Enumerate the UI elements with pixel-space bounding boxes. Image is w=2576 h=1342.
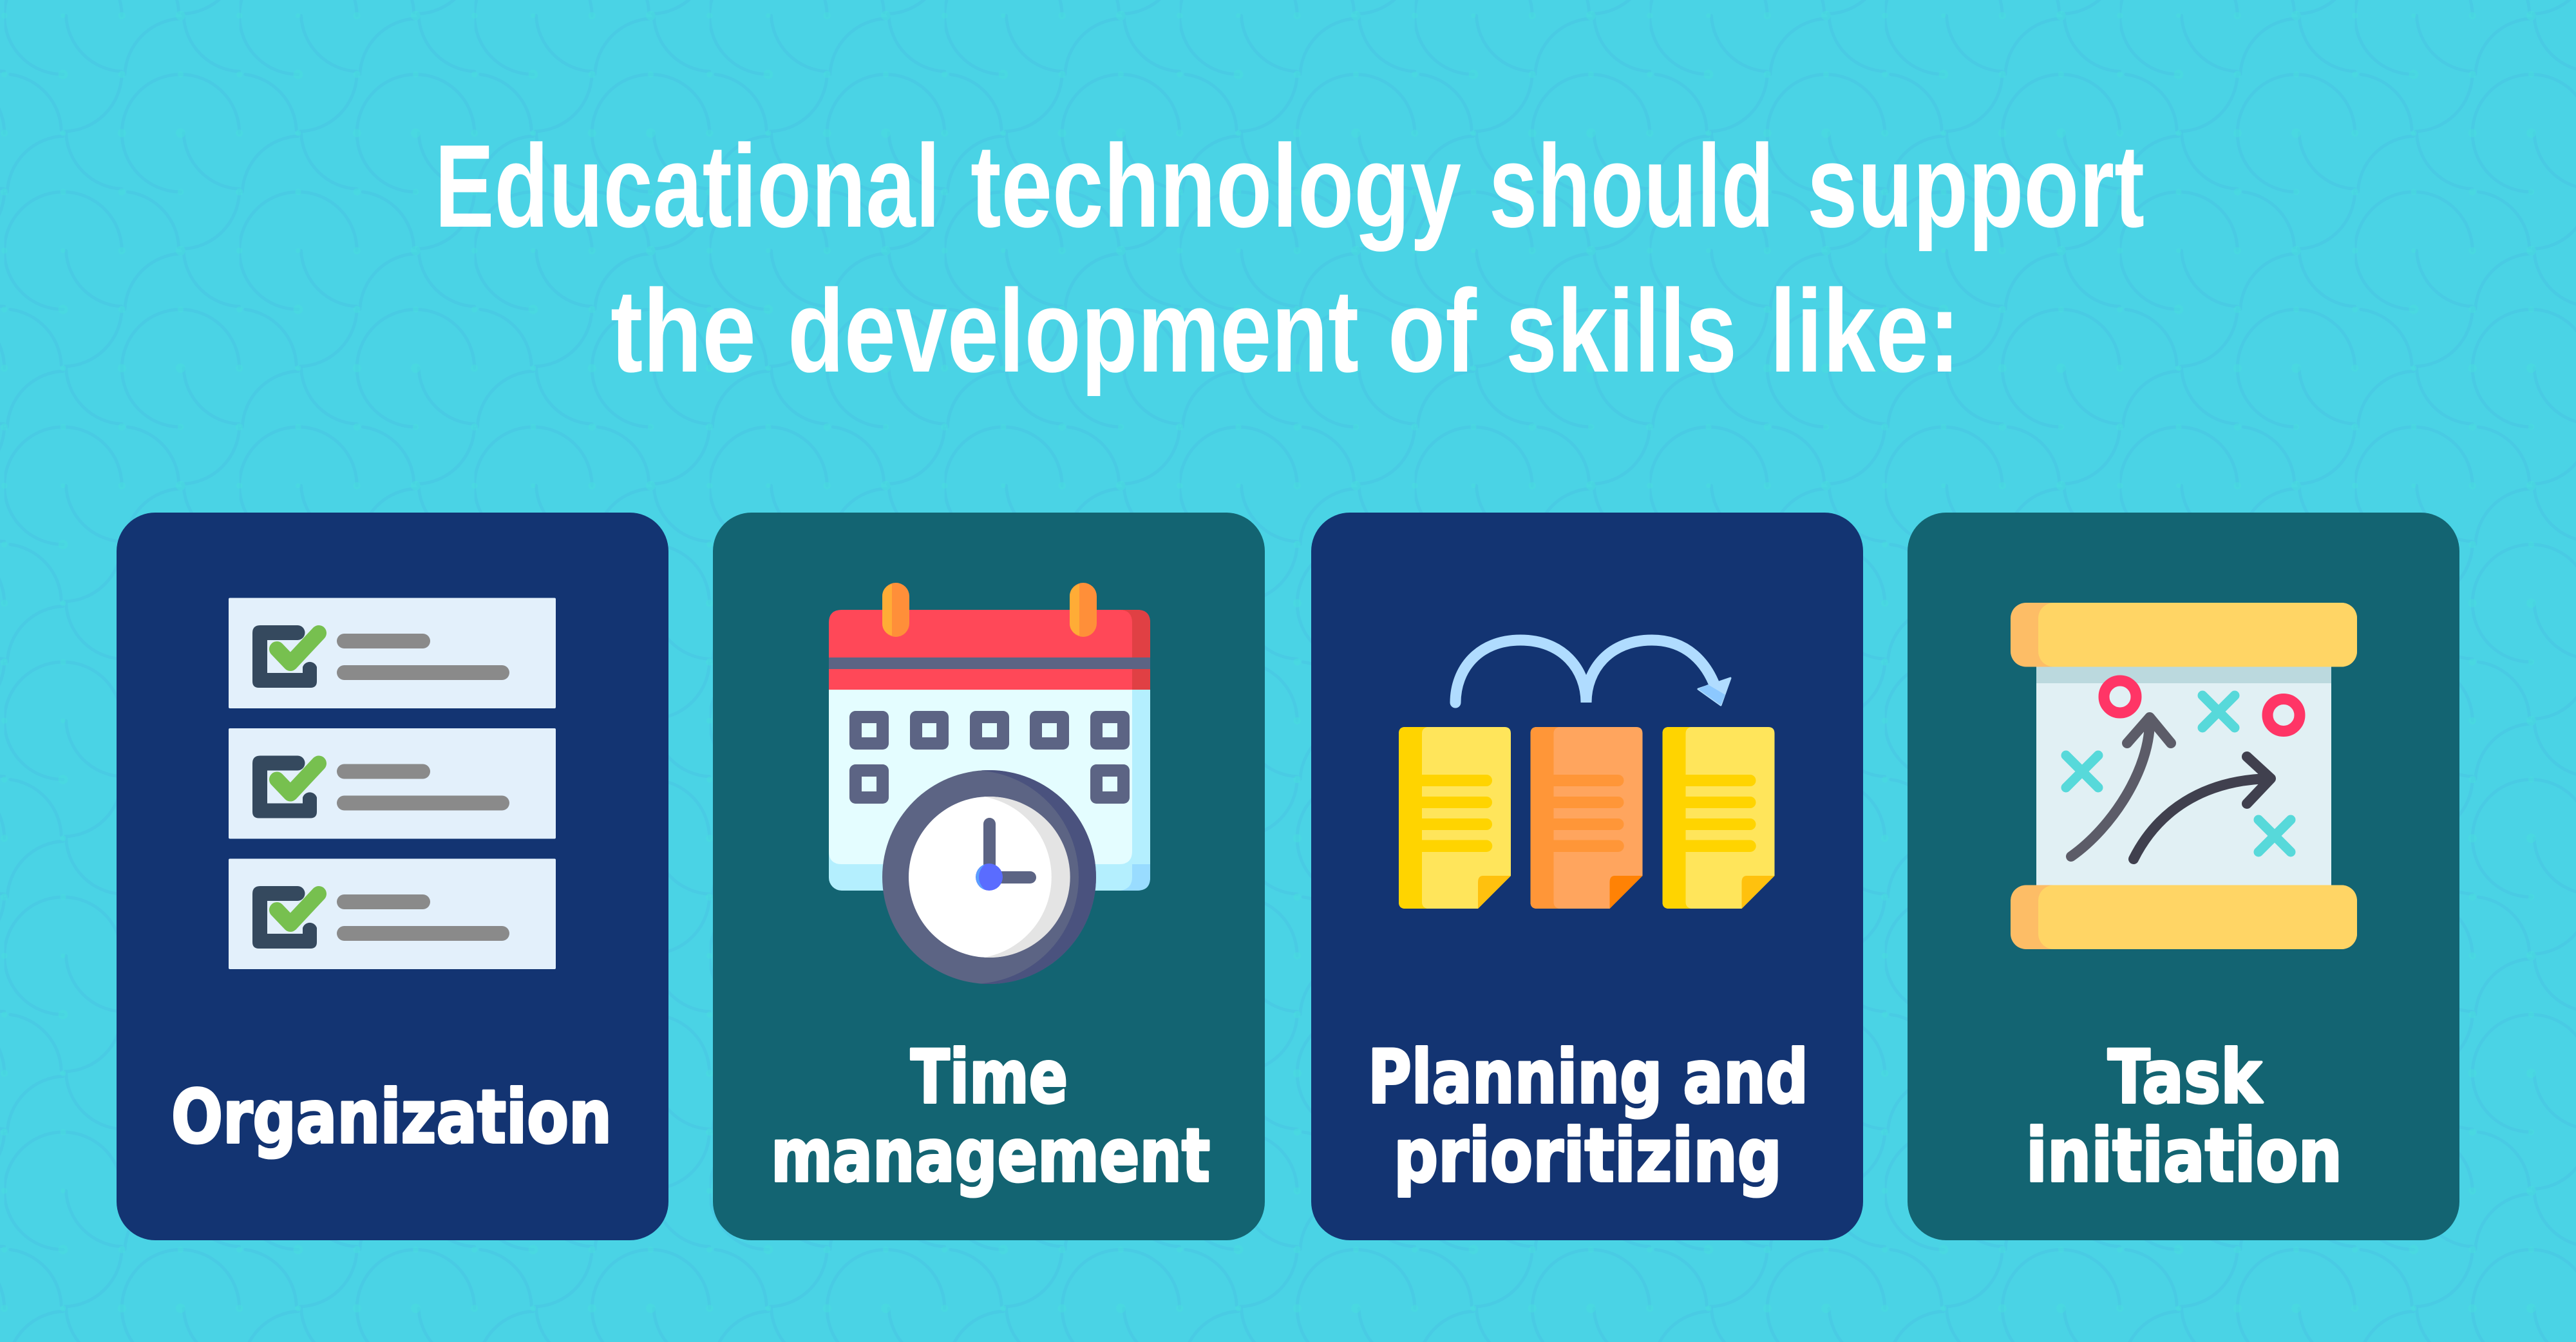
panel: planning and prioritizing [1311,513,1863,1240]
arrow 1 [2071,717,2171,856]
label: planning and prioritizing [1368,1034,1808,1198]
icon: strategy scroll [2011,603,2357,949]
title: of [1388,265,1477,397]
scroll paper [2036,666,2331,885]
panel: time management [713,513,1265,1240]
label: time management: Time [911,1034,1068,1120]
label: time management: management [771,1113,1210,1198]
top roller [2011,603,2357,667]
checklist row 3 [229,859,556,969]
cross marks [2066,695,2291,852]
label: task initiation [2026,1034,2342,1198]
icon: calendar with clock [829,583,1150,984]
checklist row 2 [229,728,556,838]
icon: checklist [229,598,556,969]
label: time management [771,1034,1210,1198]
title: development [788,265,1359,397]
label: planning and prioritizing: Planning and [1368,1034,1808,1120]
panel: organization [117,513,668,1240]
calendar day squares [855,717,1123,797]
clock [882,770,1096,984]
icon: sticky notes with arrow [1399,640,1775,909]
title: support [1807,120,2145,252]
label: task initiation: Task [2108,1034,2263,1120]
note 1 [1399,727,1511,909]
title: like: [1770,265,1960,397]
circle marks [2104,681,2300,732]
calendar header [829,610,1150,690]
title: should [1489,120,1774,252]
curved arrow [1455,640,1730,705]
label: task initiation: initiation [2026,1113,2342,1198]
title [435,120,2145,397]
label: planning and prioritizing: prioritizing [1394,1113,1782,1198]
calendar rings [882,583,1097,637]
bottom roller [2011,885,2357,949]
title: technology [971,120,1461,252]
title: Educational [435,120,940,252]
note 3 [1663,727,1775,909]
note 2 [1530,727,1642,909]
arrow 2 [2134,757,2271,859]
calendar body [829,670,1150,891]
title: skills [1506,265,1737,397]
label: organization: Organization [171,1074,612,1160]
checklist row 1 [229,598,556,708]
panel: task initiation [1908,513,2459,1240]
title: the [611,265,756,397]
